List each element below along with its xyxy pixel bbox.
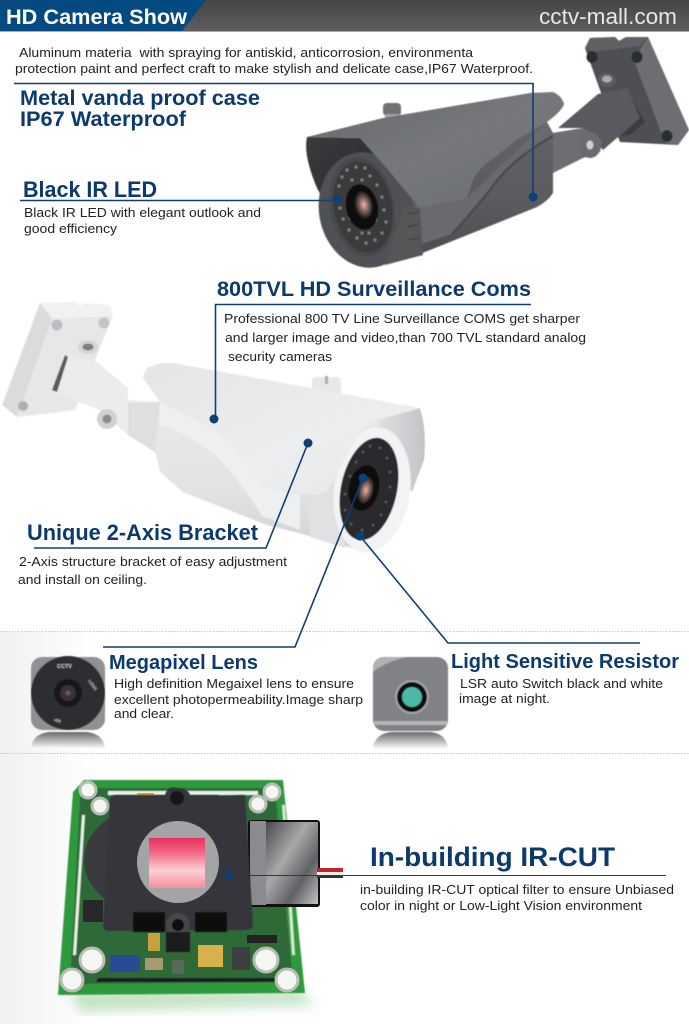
lens description: High definition Megaixel lens to ensure [114, 676, 354, 691]
header site name: cctv-mall.com [539, 4, 677, 29]
section divider bottom [0, 752, 689, 754]
white camera body swoosh [160, 402, 300, 530]
white camera body [155, 400, 400, 552]
gray camera arm [552, 88, 645, 173]
PCB mounting holes [61, 782, 298, 991]
gray camera IR LEDs [337, 165, 388, 245]
icon: lens thumbnail: MP [53, 717, 62, 724]
lens description [114, 676, 363, 721]
bracket heading: Unique 2-Axis Bracket [27, 520, 259, 545]
lens heading: Megapixel Lens [109, 651, 258, 674]
800TVL leader line [216, 304, 531, 419]
IR-CUT leader dot [224, 870, 234, 880]
resistor description: image at night. [459, 691, 550, 706]
IR-CUT description [360, 882, 674, 913]
bracket description: and install on ceiling. [18, 572, 147, 587]
800TVL description: and larger image and video,than 700 TVL standard analog [225, 330, 586, 345]
lens description: excellent photopermeability.Image sharp [114, 692, 363, 707]
callout: IR-CUT [224, 842, 674, 913]
case description [15, 45, 533, 76]
800TVL description [224, 311, 586, 364]
callout: black IR LED [20, 177, 342, 236]
case heading: Metal vanda proof case [20, 87, 260, 110]
header title: HD Camera Show [6, 6, 188, 29]
bracket leader dot [304, 438, 312, 448]
gray camera photo [306, 37, 689, 275]
white hood underside [377, 408, 425, 492]
PCB components [83, 793, 277, 974]
resistor leader dot [356, 532, 364, 540]
IR-CUT description: color in night or Low-Light Vision environment [360, 898, 642, 913]
resistor description: LSR auto Switch black and white [460, 676, 663, 691]
IR-CUT circuit board photo [58, 780, 343, 1012]
IR-CUT heading: In-building IR-CUT [370, 842, 616, 872]
white camera IR LEDs [344, 445, 391, 531]
case heading [20, 87, 260, 131]
bracket description: 2-Axis structure bracket of easy adjustment [19, 554, 287, 569]
green PCB [58, 780, 305, 995]
800TVL description: security cameras [228, 349, 333, 364]
white camera hood [143, 363, 420, 495]
header band [0, 0, 689, 32]
icon: resistor thumbnail [373, 657, 448, 749]
800TVL description: Professional 800 TV Line Surveillance COMS get sharper [224, 311, 581, 326]
lens description: and clear. [114, 706, 174, 721]
callout: 2-axis bracket [18, 438, 312, 587]
section divider top [0, 630, 689, 632]
callout: light sensitive resistor [356, 532, 679, 749]
gray camera body [360, 122, 553, 267]
white camera lens [345, 462, 383, 514]
black lens mount [103, 787, 253, 952]
callout: 800TVL sensor [210, 277, 586, 424]
gray top screw [383, 103, 401, 120]
IR-CUT description: in-building IR-CUT optical filter to ensure Unbiased [360, 882, 674, 897]
board shadow [70, 990, 315, 1012]
gray camera body swoosh [415, 122, 553, 246]
case description: protection paint and perfect craft to make stylish and delicate case,IP67 Waterproof. [15, 61, 533, 76]
silver foil IR-CUT box [248, 820, 320, 907]
resistor heading: Light Sensitive Resistor [451, 650, 679, 673]
pink IR filter [149, 838, 205, 888]
800TVL leader dot [210, 414, 218, 424]
gray camera front ring [310, 145, 423, 275]
resistor leader line [360, 536, 640, 643]
resistor description [459, 676, 663, 706]
side black cylinder [84, 817, 110, 903]
IR LED description [24, 205, 261, 236]
gray camera hood [307, 92, 564, 208]
bracket leader line [34, 443, 308, 548]
gray camera lens [342, 181, 382, 233]
IR LED leader dot [332, 194, 342, 204]
800TVL heading: 800TVL HD Surveillance Coms [217, 277, 531, 301]
case heading: IP67 Waterproof [20, 108, 187, 131]
bracket description [18, 554, 287, 587]
white camera front ring [307, 422, 418, 558]
lower section background [0, 632, 689, 1024]
icon: lens thumbnail: LENS [87, 679, 98, 691]
IR-CUT leader line [229, 874, 666, 876]
case leader line [14, 84, 533, 197]
white camera photo [2, 302, 425, 558]
IR LED description: Black IR LED with elegant outlook and [24, 205, 261, 220]
IR LED leader line [20, 200, 337, 202]
lens leader dot [358, 474, 368, 482]
lens leader line [103, 478, 363, 647]
white top screw [312, 376, 341, 397]
case description: Aluminum materia with spraying for antiskid, anticorrosion, environmenta [19, 45, 474, 60]
case leader dot [528, 192, 538, 202]
icon: lens thumbnail: CCTV [57, 664, 72, 670]
callout: megapixel lens [31, 474, 368, 749]
lens aperture [137, 821, 219, 903]
callout: metal case [14, 45, 538, 202]
IR LED heading: Black IR LED [23, 177, 157, 202]
connector wires [317, 868, 343, 878]
gray hood underside [306, 137, 403, 240]
gray camera wall plate [585, 37, 689, 145]
white camera arm [52, 340, 160, 452]
white camera wall plate [2, 302, 113, 417]
IR LED description: good efficiency [24, 221, 118, 236]
icon: lens thumbnail [31, 656, 105, 749]
